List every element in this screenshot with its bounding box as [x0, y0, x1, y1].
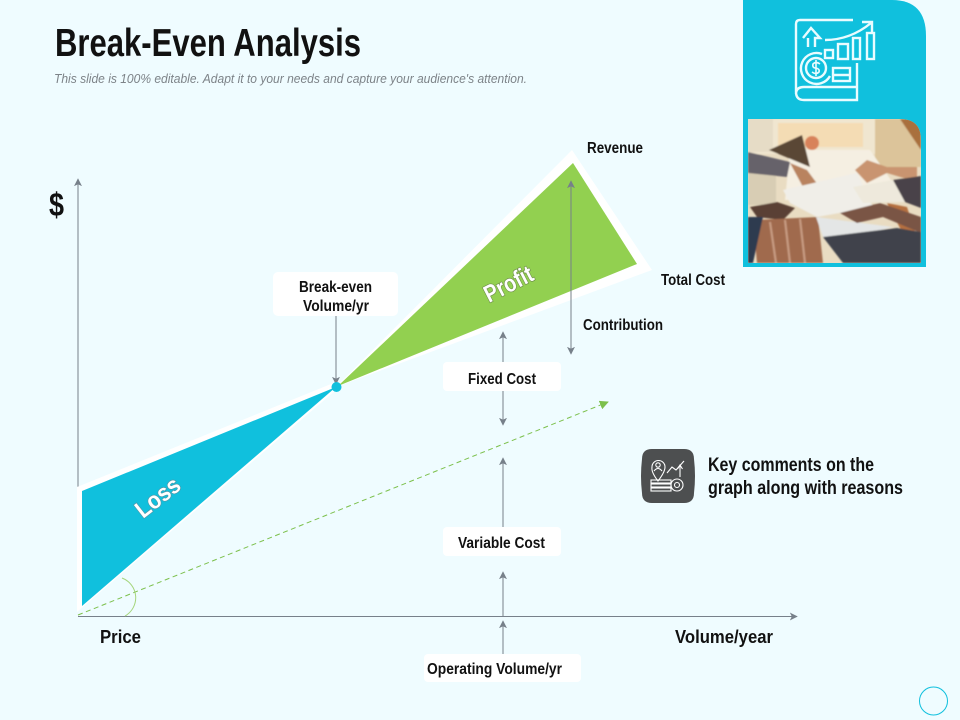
variable cost label: Variable Cost — [458, 535, 545, 552]
arrow: variable cost up — [502, 458, 504, 527]
subtitle: This slide is 100% editable. Adapt it to your needs and capture your audience's attention. — [54, 71, 527, 86]
key comments text: graph along with reasons — [708, 478, 903, 499]
price label: Price — [100, 626, 141, 647]
arrow: operating volume up — [502, 621, 504, 654]
dollar symbol: $ — [49, 186, 64, 223]
arrow: fixed cost down — [502, 391, 504, 425]
variable cost trend line (dashed) — [78, 402, 608, 615]
volume per year label: Volume/year — [675, 626, 773, 647]
arrow: fixed cost up — [502, 332, 504, 362]
fixed cost label — [443, 362, 561, 391]
revenue label: Revenue — [587, 140, 643, 157]
key comments text — [708, 455, 903, 499]
profit wedge — [336, 150, 652, 387]
fixed cost label: Fixed Cost — [468, 371, 536, 388]
contribution label: Contribution — [583, 317, 663, 334]
break-even point — [332, 382, 342, 392]
operating volume label — [424, 654, 581, 682]
x axis — [78, 616, 797, 618]
break-even callout — [273, 272, 398, 316]
total cost label: Total Cost — [661, 272, 725, 289]
title: Break-Even Analysis — [55, 22, 361, 65]
loss label: Loss — [130, 472, 186, 524]
key comments text: Key comments on the — [708, 455, 874, 476]
profit label: Profit — [479, 261, 538, 308]
arrow: contribution span — [570, 181, 572, 354]
icon: finance book shadow and lines — [796, 20, 874, 100]
break-even callout: Volume/yr — [303, 298, 369, 315]
loss wedge — [77, 382, 336, 612]
variable cost label — [443, 527, 561, 556]
arrow: break-even to point — [335, 316, 337, 384]
icon: key comments badge — [641, 449, 695, 503]
y axis — [77, 179, 79, 487]
break-even callout: Break-even — [299, 279, 372, 296]
photo: meeting over documents — [748, 119, 921, 263]
page marker circle — [920, 687, 948, 715]
price angle arc — [122, 578, 136, 616]
arrow: variable cost down — [502, 572, 504, 616]
operating volume label: Operating Volume/yr — [427, 661, 562, 678]
panel: teal header with icon and photo — [743, 0, 926, 267]
